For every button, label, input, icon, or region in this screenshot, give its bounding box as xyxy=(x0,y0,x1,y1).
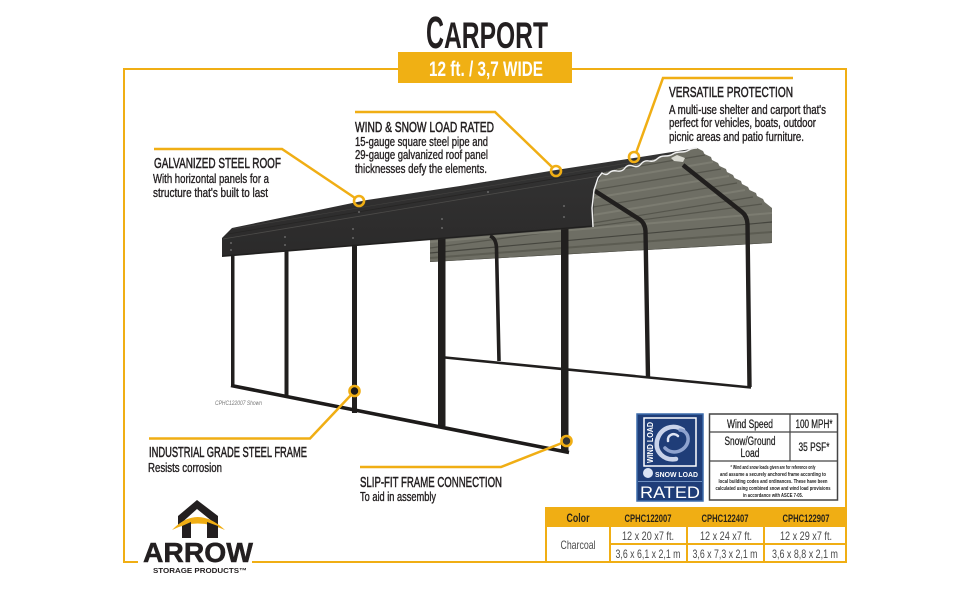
load rating footnote: calculated using combined snow and wind load provisions xyxy=(716,486,830,492)
callout: slip-fit frame connection: To aid in assembly xyxy=(360,490,437,504)
icon: swirl xyxy=(657,427,688,459)
bottom rail xyxy=(231,386,569,452)
load rating table: Snow/Ground xyxy=(724,436,776,448)
table body: 12 x 29 x7 ft. xyxy=(780,529,832,543)
table body: 3,6 x 7,3 x 2,1 m xyxy=(692,547,758,561)
title: C xyxy=(426,7,444,58)
arrow storage products logo xyxy=(143,500,254,575)
callout: wind and snow load rated: 15-gauge square steel pipe and xyxy=(355,135,488,149)
callout: slip-fit frame connection xyxy=(360,436,572,504)
callout: versatile protection: A multi-use shelter and carport that's xyxy=(669,103,826,117)
load rating footnote: local building codes and ordinances. These have been xyxy=(718,479,828,485)
front posts xyxy=(231,224,568,452)
title: ARPORT xyxy=(444,15,548,56)
wind and snow load rated badge: WIND LOAD xyxy=(645,422,655,463)
shown model caption: CPHC122007 Shown xyxy=(215,400,262,407)
callout: industrial grade steel frame: Resists corrosion xyxy=(148,461,222,475)
arrow storage products logo: ARROW xyxy=(143,537,254,568)
load rating footnote xyxy=(716,465,830,499)
table body: 12 x 20 x7 ft. xyxy=(622,529,674,543)
table body: 12 x 24 x7 ft. xyxy=(700,529,752,543)
roof bolts xyxy=(230,191,565,251)
table body xyxy=(560,529,838,561)
callout: versatile protection xyxy=(629,78,826,162)
white cutaway edge xyxy=(592,148,697,227)
callout: versatile protection: picnic areas and patio furniture. xyxy=(669,130,804,144)
arrow storage products logo: STORAGE PRODUCTS™ xyxy=(153,566,247,575)
underside roof panels xyxy=(430,148,772,262)
callout: galvanized steel roof xyxy=(153,149,364,206)
product size table xyxy=(545,507,847,563)
callout: galvanized steel roof: structure that's built to last xyxy=(153,186,268,200)
icon: house roof xyxy=(178,500,218,526)
rear posts and rafters xyxy=(445,165,751,388)
table body: Charcoal xyxy=(560,538,596,552)
callout: industrial grade steel frame xyxy=(148,386,360,475)
table header: CPHC122407 xyxy=(702,513,748,525)
table header: CPHC122907 xyxy=(782,513,830,525)
wind and snow load rated badge: RATED xyxy=(640,483,700,502)
charcoal roof xyxy=(222,148,697,257)
callout: wind and snow load rated: 29-gauge galvanized roof panel xyxy=(355,148,488,162)
callout: wind and snow load rated: thicknesses defy the elements. xyxy=(355,162,487,176)
load rating footnote: * Wind and snow loads given are for reference only xyxy=(730,465,816,471)
title xyxy=(426,7,548,58)
table body: 3,6 x 8,8 x 2,1 m xyxy=(772,547,838,561)
callout: versatile protection: VERSATILE PROTECTION xyxy=(669,85,793,101)
icon: snowflake xyxy=(643,468,653,478)
load rating table xyxy=(709,414,838,500)
load rating footnote: in accordance with ASCE 7-05. xyxy=(743,493,803,499)
load rating table: Load xyxy=(740,448,760,460)
load rating table: 100 MPH* xyxy=(796,419,833,431)
callout: industrial grade steel frame: INDUSTRIAL GRADE STEEL FRAME xyxy=(149,445,307,461)
callout: galvanized steel roof: With horizontal panels for a xyxy=(153,172,269,186)
callout: slip-fit frame connection: SLIP-FIT FRAME CONNECTION xyxy=(360,475,502,491)
wind and snow load rated badge: SNOW LOAD xyxy=(655,470,699,479)
load rating table: 35 PSF* xyxy=(798,442,830,454)
callout: wind and snow load rated xyxy=(355,112,561,176)
table header xyxy=(566,513,830,525)
callout: galvanized steel roof: GALVANIZED STEEL ROOF xyxy=(154,156,281,172)
load rating table: Wind Speed xyxy=(727,419,773,431)
table header: Color xyxy=(566,513,590,525)
load rating footnote: and assume a securely anchored frame according to xyxy=(720,472,826,478)
outer orange frame xyxy=(124,69,846,562)
carport illustration xyxy=(222,140,775,452)
callout: wind and snow load rated: WIND & SNOW LOAD RATED xyxy=(355,120,494,136)
wind and snow load rated badge xyxy=(637,414,703,502)
table body: 3,6 x 6,1 x 2,1 m xyxy=(616,547,680,561)
table header: CPHC122007 xyxy=(624,513,672,525)
callout: versatile protection: perfect for vehicles, boats, outdoor xyxy=(669,116,816,130)
width banner: 12 ft. / 3,7 WIDE xyxy=(429,57,543,81)
width banner xyxy=(398,52,572,83)
